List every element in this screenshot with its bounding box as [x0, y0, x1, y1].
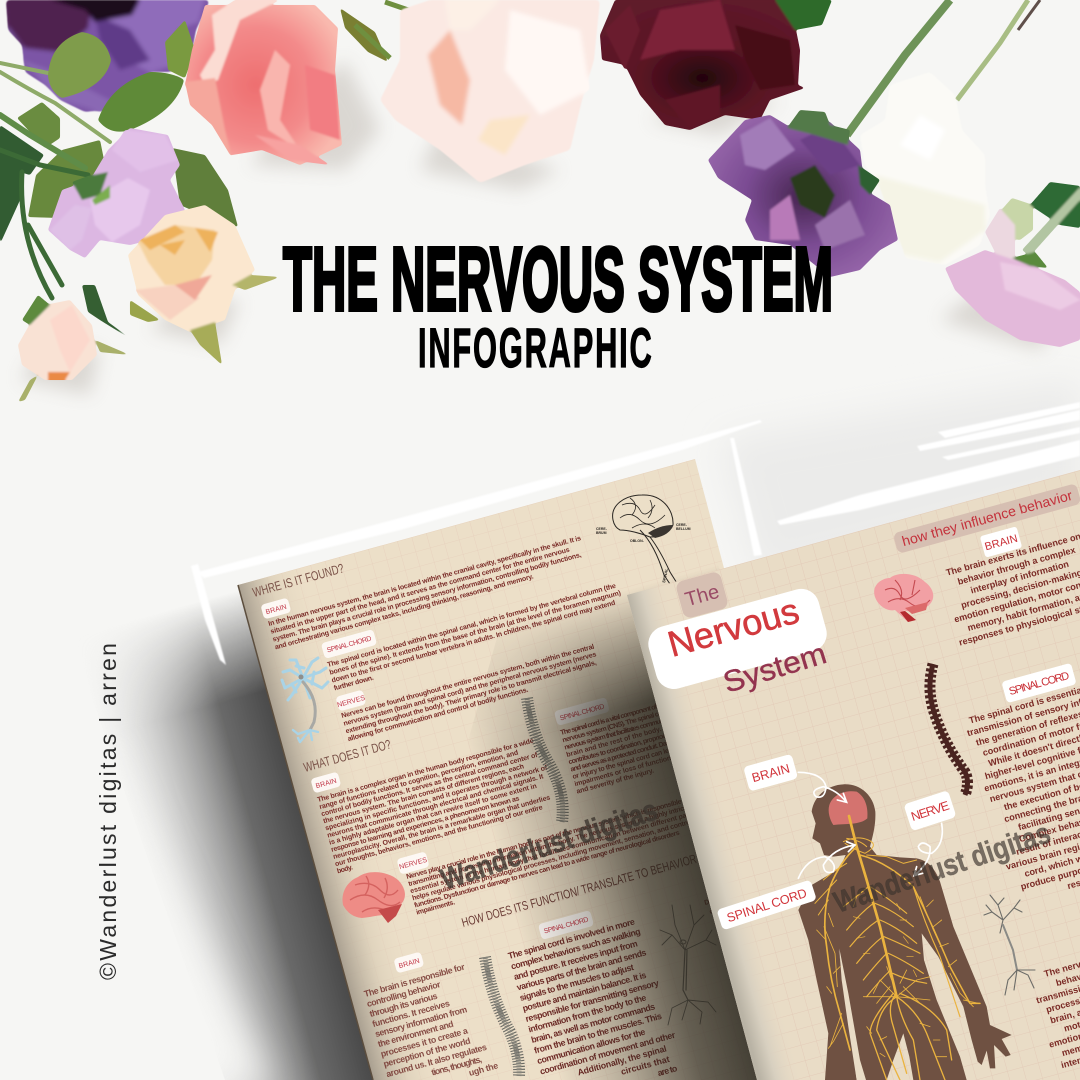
text: spinal cord location: down to the first or second lumbar vertebra in adults. In children, the spinal cord may extend	[331, 600, 616, 685]
text: spinal cord location: The spinal cord is located within the spinal canal, which is formed by the vertebral column (the	[327, 583, 617, 669]
icon: neuron sketch	[660, 905, 716, 1025]
text: nerves function: functions. Dysfunction or damage to nerves can lead to a wide range of neurological disorders	[414, 830, 681, 909]
text: brain location: situated in the upper part of the head, and it serves as the command center for the entire nervous	[270, 547, 571, 636]
text: spinal cord behavior: coordination of movement and other	[539, 1030, 677, 1077]
text: truncated column: to the	[744, 959, 794, 979]
text: brain influence	[939, 529, 1080, 648]
heading: where is it found: WHRE IS IT FOUND?	[251, 560, 345, 600]
title word: nervous: Nervous	[663, 590, 803, 665]
page sheet	[627, 470, 1080, 1080]
chip: brain 3	[393, 952, 424, 973]
diagram: human body nervous system	[716, 754, 1012, 1080]
text: spinal cord function: nervous system (CNS). The spinal cord is a	[562, 706, 679, 744]
text: spinal cord function	[560, 698, 693, 796]
text: truncated column: with	[758, 986, 809, 1006]
icon: dark spine	[930, 664, 968, 795]
chip: nerves: NERVES	[337, 695, 366, 709]
credit: ©Wanderlust digitas | arren	[95, 643, 121, 980]
text: nerves influence	[1029, 944, 1080, 1072]
text: nerves function: Nerves play a crucial role in the human body as part of the nervous system, which is responsible for	[406, 796, 692, 881]
text: spinal cord behavior	[507, 914, 686, 1080]
text: spinal cord function: impairments or loss of function	[574, 755, 672, 788]
flower: pale blush rose	[380, 0, 600, 183]
text: brain function: range of functions related to cognition, perception, emotion, and	[319, 750, 519, 811]
icon: pink brain right	[874, 574, 933, 622]
text: brain function: is a highly adaptable organ that can rewire itself to some extent in	[328, 783, 538, 847]
text: brain behavior: The brain is responsible for	[363, 962, 466, 999]
chip: brain 3: BRAIN	[398, 958, 421, 970]
text: spinal cord behavior: various parts of the brain and sends	[516, 947, 647, 992]
flower arrangement	[0, 0, 1080, 402]
text: nerves location: nervous system (brain and spinal cord) and the peripheral nervous system (nerves	[343, 651, 597, 728]
text: truncated column: cord can	[709, 896, 759, 916]
text: truncated column: system	[764, 995, 815, 1015]
page sheet	[238, 459, 860, 1080]
text: spinal cord function: or injury to the spinal cord can lead to	[572, 744, 685, 781]
stems right	[847, 0, 950, 135]
text: brain influence: behavior through a complex	[957, 545, 1077, 587]
text: truncated column: effects	[718, 914, 769, 934]
text: truncated column: nerve	[724, 923, 774, 943]
text: brain behavior: controlling behavior	[366, 979, 442, 1009]
text: brain behavior: around us. It also regulates	[385, 1042, 488, 1079]
heading: what does it do: WHAT DOES IT DO?	[302, 737, 393, 775]
text: brain function: our thoughts, behaviors, emotions, and the functioning of our entire	[334, 804, 544, 868]
text: brain behavior: through its various	[368, 991, 439, 1019]
text: spinal cord behavior: posture and maintain balance. It is	[521, 970, 647, 1013]
panel: back page	[237, 459, 757, 1080]
text: nerves function: helps regulate various physiological processes, including movement, sensation, and control	[412, 819, 693, 902]
text: nerves function	[406, 796, 702, 917]
text: nerves function: impairments.	[415, 899, 456, 917]
icon: brain sketch with labels: BRUM	[596, 531, 607, 535]
text: brain behavior: ugh the	[468, 1060, 499, 1078]
text: spinal cord behavior: complex behaviors such as walking	[510, 926, 642, 971]
text: brain function: neurons that communicate through electrical and chemical signals. It	[326, 773, 545, 840]
flower: white hydrangea	[860, 72, 990, 265]
text: spinal cord function: The spinal cord is a vital component of	[560, 703, 659, 737]
text: brain influence: The brain exerts its influence on	[945, 531, 1080, 578]
pill: how they influence behavior: how they influence behavior	[900, 487, 1074, 549]
icon: spine drawing 2	[485, 957, 519, 1076]
text: nerves location: allowing for communication and control of bodily functions.	[347, 687, 529, 743]
flower: bud	[18, 285, 140, 402]
text: spinal cord behavior: communication allows for the	[536, 1027, 647, 1066]
callout: spinal cord: SPINAL CORD	[725, 886, 809, 925]
text: spinal cord behavior: brain, as well as motor commands	[530, 1001, 656, 1045]
text: brain behavior	[363, 960, 499, 1080]
text: spinal cord function: contributes to coordination, proprioception,	[568, 728, 685, 766]
flower: pink rose	[185, 0, 342, 165]
chip: the	[675, 571, 729, 619]
icon: brain sketch with labels: CERE-	[596, 527, 608, 531]
grey backdrop right	[720, 380, 1080, 580]
body silhouette	[798, 784, 1012, 1080]
text: spinal cord behavior: are to	[656, 1063, 679, 1078]
icon: brain sketch with labels: CERE-	[676, 523, 688, 527]
chip: spinal cord right	[1001, 663, 1077, 703]
text: truncated column: both	[714, 905, 764, 925]
book mockup shadow	[113, 595, 372, 1080]
chip: spinal chord 2	[554, 697, 610, 726]
page shading cast by front page	[474, 596, 757, 1080]
text: spinal cord location: further down.	[333, 675, 375, 692]
callout: nerve: NERVE	[909, 799, 951, 824]
text: brain influence: interplay of information	[969, 559, 1070, 595]
chip: spinal chord: SPINAL CHORD	[326, 635, 372, 654]
text: spinal cord behavior: and posture. It receives input from	[513, 938, 639, 982]
heading: how does its function translate to behavior: HOW DOES ITS FUNCTION/ TRANSLATE TO BEHAVIOR	[460, 852, 698, 930]
flower: purple anemone	[708, 110, 898, 277]
icon: brain sketch with labels: OBLON-	[630, 539, 645, 543]
text: brain location: and orchestrating various complex tasks, including thinking, reasoning, and memory.	[274, 573, 534, 651]
text: spinal cord location: bones of the spine). It extends from the base of the brain (at the level of the foramen magnum)	[329, 590, 622, 677]
chip: brain right: BRAIN	[983, 533, 1019, 553]
icon: brain sketch with labels: SPINAL	[661, 567, 669, 583]
icon: blue neuron	[282, 658, 328, 742]
chip: brain	[260, 598, 291, 619]
text: truncated column: sensory	[739, 950, 789, 970]
chip: nerves 2	[396, 851, 430, 875]
icon: pink brain	[342, 872, 405, 923]
text: brain function: body.	[336, 864, 354, 875]
callout: spinal cord	[716, 842, 855, 930]
text: spinal cord function: brain and the rest of the body. It also	[566, 720, 683, 759]
title word: system: System	[719, 637, 830, 700]
brain area	[829, 791, 868, 825]
chip: spinal chord	[321, 629, 377, 659]
text: spinal cord behavior: information from the body to the	[527, 992, 648, 1034]
text: brain function: The brain is a complex organ in the human body responsible for a wide	[317, 738, 535, 804]
text: truncated column: Dysfunction of	[704, 887, 754, 907]
text: spinal cord behavior: signals to the muscles to adjust	[518, 962, 635, 1003]
text: nerves location: Nerves can be found throughout the entire nervous system, both within the central	[341, 644, 595, 720]
panel: front page	[627, 470, 1080, 1080]
text: brain behavior: sensory information from	[374, 1004, 468, 1039]
flower: lilac peony left	[48, 128, 185, 258]
text: truncated column: process	[734, 941, 784, 961]
text: spinal cord behavior: circuits that	[620, 1054, 671, 1077]
text: spinal cord behavior: The spinal cord is involved in more	[507, 916, 636, 961]
icon: neuron sketch front	[984, 895, 1035, 995]
arm gap	[839, 948, 866, 1080]
chip: brain 2	[310, 772, 341, 793]
text: brain behavior: tions, thoughts,	[430, 1054, 483, 1077]
chip: spinal chord 3	[538, 910, 594, 940]
soft shadows under flowers	[20, 60, 1060, 395]
flower: burgundy rose	[600, 0, 832, 130]
text: brain behavior: functions. It receives	[371, 998, 451, 1029]
leaves left	[0, 8, 388, 244]
stems left pale	[0, 63, 110, 142]
subtitle: INFOGRAPHIC	[418, 316, 652, 379]
text: brain location: In the human nervous system, the brain is located within the cranial cavity, specifically in the skull. It is	[268, 535, 582, 628]
flower: peach rose	[128, 205, 280, 365]
flower: purple cluster top left	[6, 0, 210, 112]
chip: brain 2: BRAIN	[315, 778, 338, 790]
chip: spinal chord 2: SPINAL CHORD	[559, 703, 605, 722]
text: truncated column: signals	[754, 977, 804, 997]
watermark: Wanderlust digitas	[437, 794, 662, 897]
text: spinal cord function: and serves as a protected conduit. Damage	[570, 736, 683, 774]
callout: brain	[743, 754, 847, 802]
chip: spinal cord right: SPINAL CORD	[1008, 670, 1071, 698]
text: spinal cord influence	[963, 675, 1080, 906]
stems left	[0, 115, 85, 168]
icon: brain sketch with labels: BELLUM	[676, 527, 691, 531]
text: nerves function: transmitting and processing information within the body. The nervous system is a highly intricate	[408, 803, 694, 888]
chip: brain: BRAIN	[265, 604, 288, 616]
text: brain function: specializing in specific functions, and it operates through a network of	[325, 764, 549, 832]
text: spinal cord behavior: Additionally, the spinal	[576, 1043, 668, 1077]
text: brain function: response to learning and experiences, a phenomenon known as	[330, 795, 520, 854]
chip: the: The	[683, 581, 722, 611]
callout: brain: BRAIN	[750, 761, 791, 785]
text: brain function: control of bodily functions. It serves as the central command center of	[321, 752, 539, 818]
text: truncated column: signals	[729, 932, 780, 952]
text: brain behavior: the environment and	[377, 1019, 455, 1049]
text: nerves function: essential system in the human body that facilitates communication between different parts	[410, 810, 696, 895]
text: spinal cord function: nervous system that facilitates communication	[564, 713, 681, 752]
text: spinal cord behavior: responsible for transmitting sensory	[524, 978, 660, 1024]
icon: brain sketch with labels	[596, 495, 691, 590]
text: brain function: neuroplasticity. Overall, the brain is a remarkable organ that underlies	[332, 794, 551, 861]
text: brain behavior: perception of the world	[382, 1036, 472, 1069]
chip: nerves	[335, 689, 367, 712]
flower: lilac rose right	[945, 182, 1080, 347]
text: brain function: the nervous system. The brain consists of different regions, each	[323, 763, 525, 825]
text: truncated column	[704, 879, 815, 1023]
chip: spinal chord 3: SPINAL CHORD	[543, 916, 589, 935]
text: brain location: system. The brain plays a crucial role in processing sensory information, controlling bodily functions,	[272, 552, 582, 644]
icon: spine drawing	[527, 698, 563, 822]
text: brain behavior: processes it to create a	[379, 1026, 469, 1059]
text: brain function	[317, 736, 561, 875]
white brush strokes	[191, 402, 1080, 665]
callout: nerve	[903, 790, 957, 876]
text: spinal cord behavior: from the brain to the muscles. This	[533, 1011, 663, 1056]
text: spinal cord function: and severity of the injury.	[576, 768, 655, 796]
text: truncated column: control	[749, 968, 799, 988]
chip: nerves 2: NERVES	[399, 857, 428, 871]
chip: brain right	[980, 526, 1022, 558]
title blob: nervous	[644, 585, 831, 693]
text: nerves location: extending throughout the body). Their primary role is to transmit electrical signals,	[345, 660, 597, 735]
nerve network	[815, 816, 980, 1080]
